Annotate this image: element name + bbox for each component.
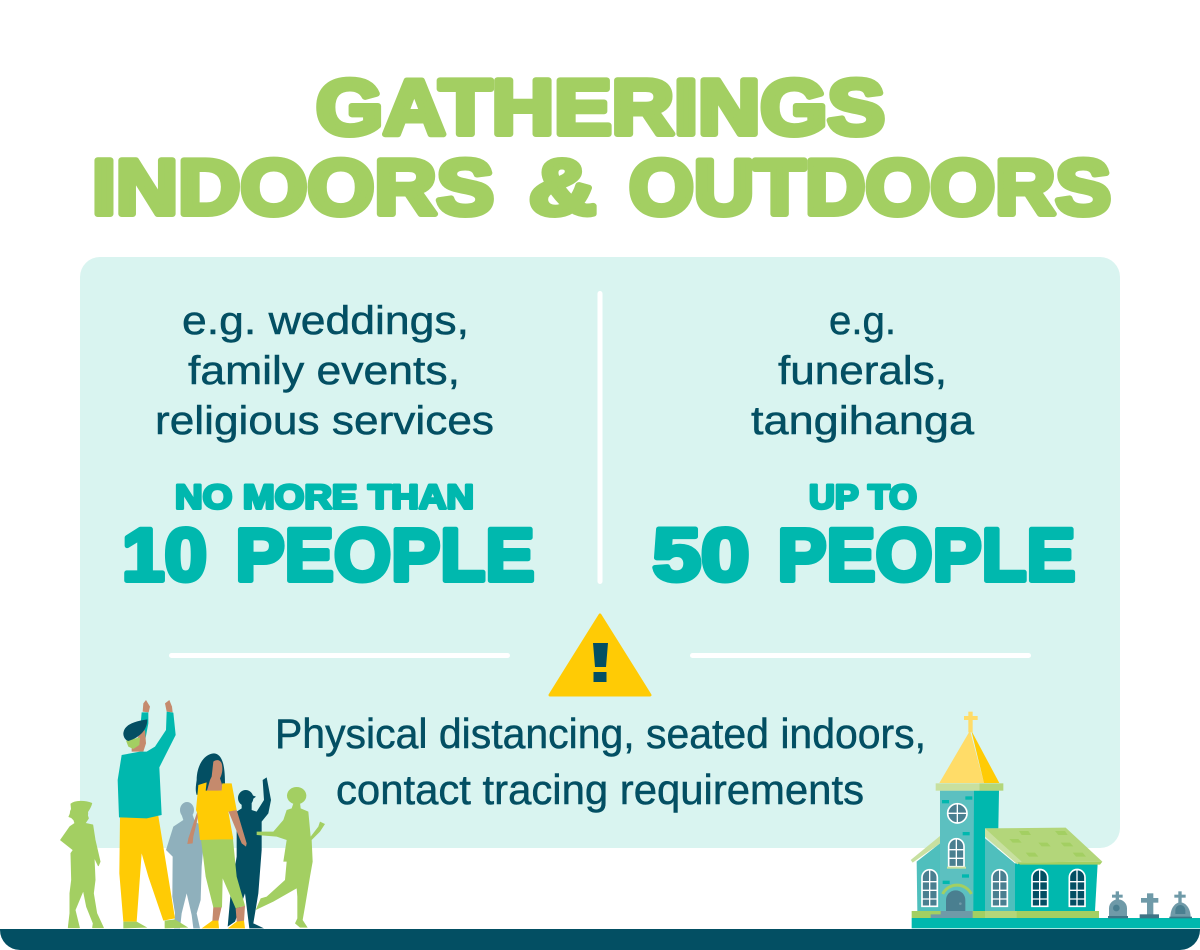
left column text: examples: religious services [155,399,494,443]
left column limit: no more than 10 people: PEOPLE [236,514,534,596]
left column text: examples: e.g. weddings, [182,299,469,343]
left column limit: no more than 10 people: NO MORE THAN [175,478,474,516]
person: dark child waving [228,777,271,928]
right column limit: up to 50 people: PEOPLE [778,514,1076,596]
title [92,63,1111,231]
right column limit: up to 50 people: 50 [652,514,750,596]
right column limit: up to 50 people: UP TO [809,478,917,516]
title: & [529,143,596,231]
requirements text [275,710,926,813]
right column limit: up to 50 people [652,478,1076,596]
church tower [940,791,999,911]
person: woman in yellow top [187,753,247,928]
church door [943,885,971,911]
church right nave [985,838,1098,911]
vertical divider [598,291,602,584]
horizontal rule right [690,653,1031,658]
left column text: examples: family events, [188,349,460,393]
illustration: group of people [61,700,325,928]
gravestones [1108,891,1192,918]
title: GATHERINGS [316,63,885,151]
illustration: church and graves [911,712,1200,928]
person: dancing woman [256,787,325,928]
round tower window [948,804,967,823]
icon: warning triangle [550,615,650,695]
church left wing [911,836,940,911]
right column text: examples: e.g. [829,299,896,343]
right column text: examples [751,299,975,443]
windows: nave [1032,869,1085,906]
person: grey child [166,802,203,928]
title: OUTDOORS [629,143,1111,231]
ground strip [912,918,1200,928]
requirements text: Physical distancing, seated indoors, [275,710,926,757]
horizontal rule left [169,653,510,658]
windows: side wings [922,870,1007,906]
ground bar [0,929,1200,950]
left column limit: no more than 10 people [122,478,534,596]
panel: background [80,257,1120,848]
right column text: examples: funerals, [778,349,947,393]
left column limit: no more than 10 people: 10 [122,514,207,596]
church roof [985,828,1102,865]
person: man with raised arms [118,700,188,928]
church platform [912,911,1099,918]
person: child with hat [61,801,103,928]
spire and cross [939,712,999,783]
tower cap [936,783,1003,791]
left column text: examples [155,299,494,443]
requirements text: contact tracing requirements [336,766,864,813]
right column text: examples: tangihanga [751,399,975,443]
title: INDOORS [92,143,494,231]
tower arched window [947,839,966,869]
